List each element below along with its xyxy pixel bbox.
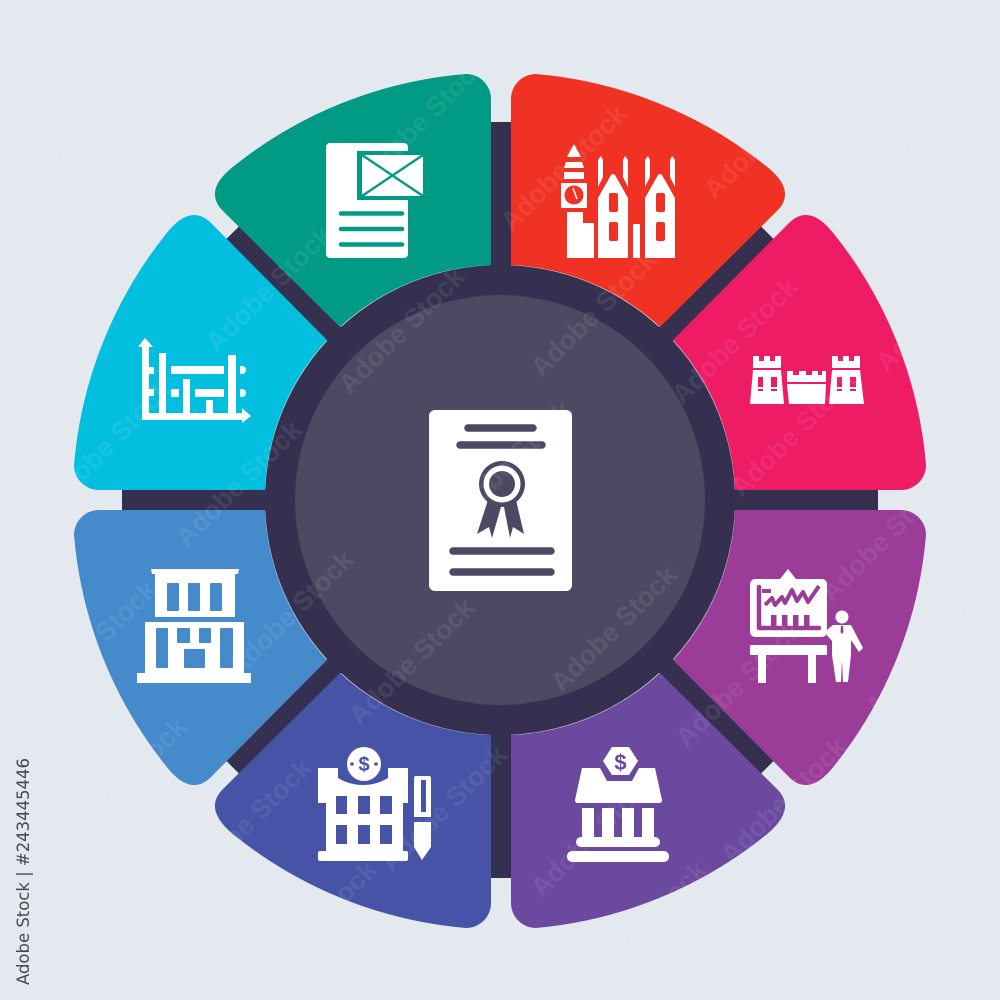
dollar sign: $ xyxy=(614,750,627,775)
icon: bar chart diagram xyxy=(138,338,251,423)
watermarks: Adobe Stock xyxy=(698,66,836,205)
watermarks: Adobe Stock xyxy=(0,254,138,393)
center ring xyxy=(265,265,735,735)
segment: pink xyxy=(673,215,926,490)
watermarks: Adobe Stock xyxy=(525,244,663,383)
watermarks: Adobe Stock xyxy=(495,98,633,237)
segment: indigo xyxy=(215,673,491,928)
icon: document with envelope xyxy=(326,143,427,258)
watermarks: Adobe Stock xyxy=(355,49,493,188)
watermarks: Adobe Stock xyxy=(38,46,176,185)
watermarks: Adobe Stock xyxy=(25,574,163,713)
watermarks: Adobe Stock xyxy=(715,731,853,870)
icon: big ben and cathedral xyxy=(561,144,675,258)
watermarks: Adobe Stock xyxy=(222,544,360,683)
dollar sign: $ xyxy=(358,754,370,776)
watermarks: Adobe Stock xyxy=(40,374,178,513)
icon: castle walls xyxy=(750,356,864,404)
segment: green xyxy=(215,74,491,327)
watermarks: Adobe Stock xyxy=(55,711,193,850)
watermarks: Adobe Stock xyxy=(170,414,308,553)
center disc xyxy=(295,295,705,705)
icon: bank with dollar xyxy=(567,747,669,862)
segment: red xyxy=(511,74,785,327)
watermarks: Adobe Stock xyxy=(245,854,383,993)
watermarks: Adobe Stock xyxy=(825,104,963,243)
watermarks: Adobe Stock xyxy=(725,364,863,503)
watermarks: Adobe Stock xyxy=(162,84,300,223)
segment: blue xyxy=(74,510,327,785)
watermarks: Adobe Stock xyxy=(375,739,513,878)
watermarks: Adobe Stock xyxy=(815,469,953,608)
icon: office building with dollar and pen xyxy=(318,747,431,861)
watermarks: Adobe Stock xyxy=(845,774,983,913)
segment: magenta xyxy=(673,510,926,785)
icon: storefront building xyxy=(137,569,251,683)
watermarks: Adobe Stock xyxy=(333,261,471,400)
watermarks: Adobe Stock xyxy=(525,764,663,903)
segment: cyan xyxy=(74,215,327,490)
watermarks: Adobe Stock xyxy=(440,394,578,533)
credit line: Adobe Stock | #243445446 xyxy=(14,758,34,985)
icon: presenter with chart xyxy=(750,569,863,683)
icon: certificate xyxy=(429,410,572,591)
watermarks: Adobe Stock xyxy=(575,854,713,993)
watermarks: Adobe Stock xyxy=(200,219,338,358)
watermarks: Adobe Stock xyxy=(860,584,998,723)
segment: violet xyxy=(511,673,785,928)
watermarks: Adobe Stock xyxy=(343,592,481,731)
watermarks: Adobe Stock xyxy=(545,559,683,698)
watermarks: Adobe Stock xyxy=(666,271,804,410)
watermarks: Adobe Stock xyxy=(670,614,808,753)
watermarks: Adobe Stock xyxy=(180,752,318,891)
